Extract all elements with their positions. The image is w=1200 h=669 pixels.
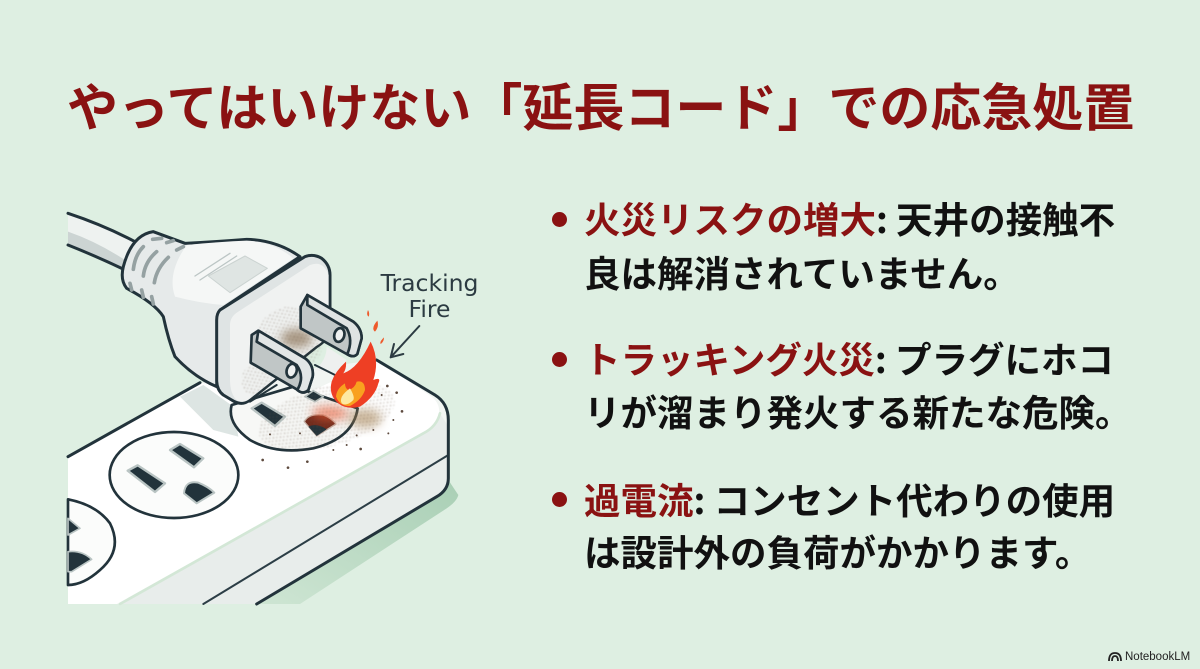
label: Tracking Fire: Fire [409,295,450,323]
bullet 2 [552,352,567,367]
icon: flame [331,310,384,408]
label: Tracking Fire: Tracking [380,269,478,297]
shadow under power strip [247,480,458,604]
prong bases [250,347,347,402]
text: fire risk line 2: 良は解消されていません。 [584,245,1020,298]
outlet: left, clipped [68,499,115,585]
power strip body [68,360,448,604]
text: overcurrent line 2: は設計外の負荷がかかります。 [584,524,1091,577]
prong front [251,331,313,392]
text: tracking fire: トラッキング火災: プラグにホコ [584,331,1114,384]
plug shadow on strip [180,385,238,437]
text: fire risk: 火災リスクの増大: 天井の接触不 [584,191,1115,244]
bullet 3 [552,492,567,507]
outlet: top, with plug [231,387,358,450]
label: Tracking Fire [380,269,478,323]
label: tracking fire arrow [391,326,419,357]
title: やってはいけない「延長コード」での応急処置 [67,67,1134,141]
logo: NotebookLM: NotebookLM [1125,651,1190,663]
prong back [301,295,362,356]
plug body [122,232,330,403]
soot on plug face [281,329,313,348]
outlet: middle [110,432,238,518]
bullet 1 [552,212,567,227]
text: tracking fire line 2: リが溜まり発火する新たな危険。 [584,384,1132,437]
text: overcurrent: 過電流: コンセント代わりの使用 [584,472,1115,525]
cord [68,213,138,270]
plug face [217,255,330,403]
scorch marks and soot [251,370,403,469]
